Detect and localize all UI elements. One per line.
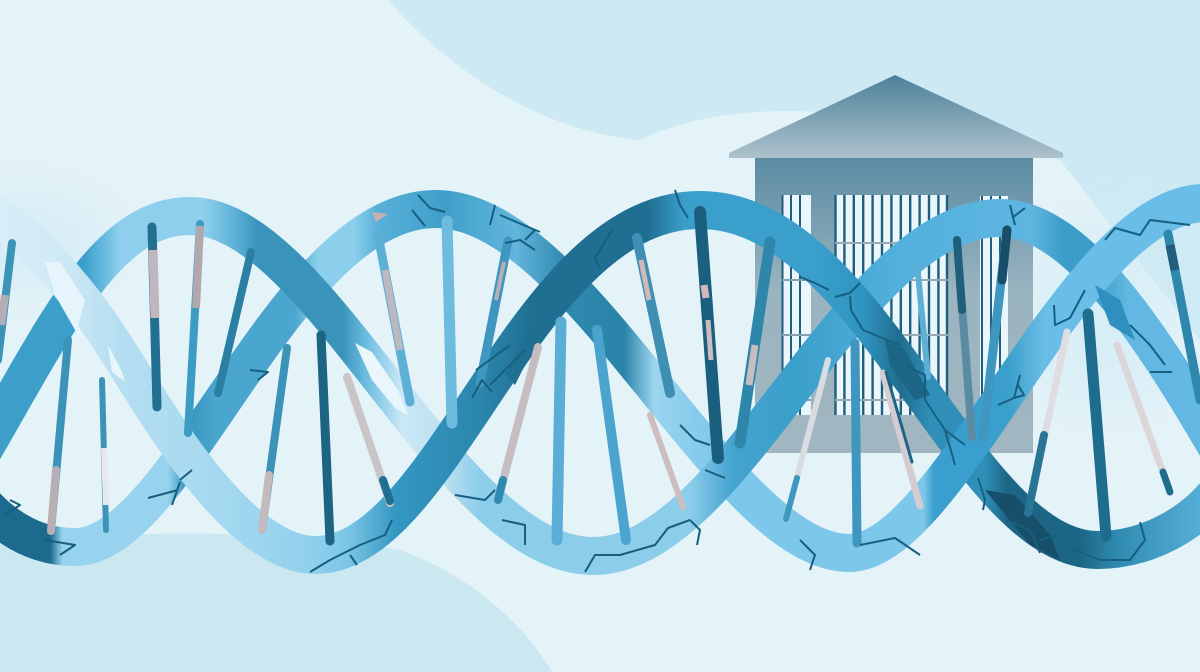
helix strand C, rear portion	[0, 203, 1200, 553]
barred window: right	[980, 196, 1008, 416]
rung 1	[152, 227, 157, 407]
rung 4	[262, 348, 287, 530]
rung 22	[883, 372, 920, 506]
rung 25	[917, 263, 928, 377]
rung 5	[321, 335, 330, 541]
barred window: centre	[835, 195, 948, 415]
rung 11	[447, 221, 452, 423]
rung 23	[957, 240, 972, 437]
building wall	[755, 158, 1033, 453]
rung 24	[983, 230, 1007, 437]
rung 14	[557, 322, 561, 540]
rung 19	[650, 415, 683, 507]
worn patches on strands	[45, 262, 1135, 560]
rung 10	[0, 243, 12, 360]
pale pink scuff on strand	[372, 212, 388, 222]
rung 13	[498, 347, 538, 500]
rung 16	[637, 238, 670, 393]
barred window: left	[782, 195, 811, 415]
rung 28	[1117, 345, 1170, 492]
rung 17	[700, 212, 718, 458]
cracks on strands	[5, 190, 1190, 572]
rung 27	[1088, 314, 1106, 536]
building roof	[729, 75, 1063, 158]
rung 12	[480, 241, 508, 383]
rung 29	[1168, 234, 1200, 400]
rung 20	[786, 360, 828, 519]
rung 3	[218, 252, 251, 393]
rung 18	[740, 242, 770, 443]
rung 6	[378, 235, 410, 402]
rung 7	[347, 377, 390, 503]
rung 15	[597, 330, 626, 540]
helix strand A	[0, 195, 1200, 555]
rung 9	[102, 380, 106, 530]
helix strand B	[0, 216, 1200, 556]
rung 2	[188, 224, 200, 433]
helix rungs	[0, 212, 1200, 543]
rung 8	[51, 340, 68, 531]
rung 26	[1028, 332, 1067, 513]
helix strand C, front portion	[900, 184, 1200, 553]
prison building	[729, 75, 1063, 453]
rung 21	[855, 343, 857, 543]
